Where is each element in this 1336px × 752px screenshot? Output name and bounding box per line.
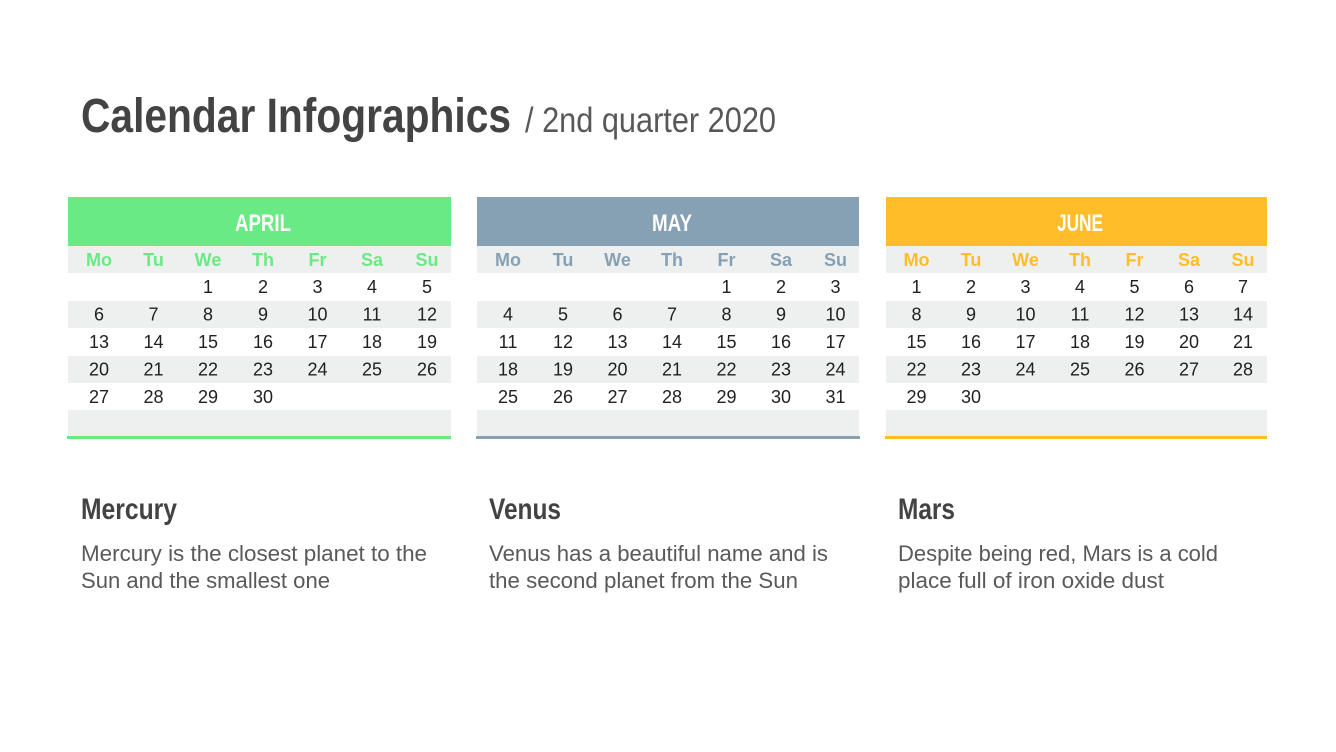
- day numbers: April: 18: [362, 332, 382, 352]
- weekday labels: May: Fr: [718, 250, 736, 270]
- day numbers: May: 11: [499, 332, 517, 352]
- day numbers: April: 7: [148, 304, 159, 324]
- day numbers: May: 4: [503, 304, 513, 324]
- day numbers: April: 30: [253, 387, 273, 407]
- day numbers: June: 20: [1179, 332, 1199, 352]
- day numbers: April: 1: [203, 277, 213, 297]
- weekday labels: April: Su: [415, 250, 439, 270]
- text block: Venus: the second planet from the Sun: [489, 568, 798, 593]
- day numbers: May: 2: [776, 277, 786, 297]
- day numbers: June: 25: [1070, 360, 1090, 380]
- day numbers: May: [498, 277, 846, 407]
- day numbers: May: 5: [558, 304, 568, 324]
- weekday labels: May: Su: [824, 250, 847, 270]
- day numbers: June: 30: [961, 387, 981, 407]
- day numbers: April: 21: [143, 360, 164, 380]
- day numbers: June: 12: [1124, 304, 1145, 324]
- weekday labels: June: Tu: [961, 250, 981, 270]
- day numbers: June: 21: [1233, 332, 1253, 352]
- day numbers: April: 22: [198, 360, 218, 380]
- day numbers: June: 29: [906, 387, 927, 407]
- weekday labels: May: We: [604, 250, 631, 270]
- day numbers: May: 29: [716, 387, 737, 407]
- weekday labels: April: Mo: [86, 250, 112, 270]
- day numbers: June: 9: [966, 304, 976, 324]
- day numbers: June: 23: [961, 360, 981, 380]
- weekday labels: May: Mo: [495, 250, 521, 270]
- day numbers: May: 13: [607, 332, 628, 352]
- day numbers: April: 13: [89, 332, 109, 352]
- weekday labels: June: We: [1012, 250, 1039, 270]
- day numbers: April: 6: [94, 304, 104, 324]
- day numbers: June: 2: [966, 277, 976, 297]
- day numbers: April: 4: [367, 277, 377, 297]
- day numbers: April: 10: [307, 304, 328, 324]
- day numbers: May: 14: [662, 332, 682, 352]
- text block: Mars: place full of iron oxide dust: [898, 568, 1164, 593]
- weekday labels: April: Th: [252, 250, 274, 270]
- day numbers: May: 8: [721, 304, 732, 324]
- day numbers: May: 22: [716, 360, 737, 380]
- day numbers: May: 25: [498, 387, 518, 407]
- text block: Mercury: Sun and the smallest one: [81, 568, 330, 593]
- day numbers: May: 6: [612, 304, 623, 324]
- month heading: April: APRIL: [235, 210, 291, 237]
- weekday labels: April: [86, 250, 439, 270]
- day numbers: June: 27: [1179, 360, 1199, 380]
- month heading: June: JUNE: [1057, 210, 1103, 237]
- day numbers: June: 28: [1233, 360, 1253, 380]
- weekday labels: April: Fr: [308, 250, 326, 270]
- day numbers: May: 7: [667, 304, 677, 324]
- day numbers: April: 14: [143, 332, 164, 352]
- weekday labels: May: Th: [661, 250, 683, 270]
- weekday labels: June: Su: [1231, 250, 1255, 270]
- day numbers: June: 1: [911, 277, 922, 297]
- weekday labels: June: Th: [1069, 250, 1091, 270]
- day numbers: April: 29: [198, 387, 218, 407]
- day numbers: June: 15: [906, 332, 927, 352]
- day numbers: June: 13: [1179, 304, 1199, 324]
- day numbers: June: 26: [1124, 360, 1145, 380]
- day numbers: April: 5: [422, 277, 432, 297]
- weekday labels: April: We: [195, 250, 221, 270]
- panel: May calendar: [476, 197, 860, 439]
- day numbers: June: 7: [1238, 277, 1248, 297]
- weekday labels: June: Mo: [904, 250, 930, 270]
- day numbers: May: 15: [716, 332, 737, 352]
- day numbers: May: 20: [607, 360, 628, 380]
- day numbers: June: 3: [1020, 277, 1031, 297]
- title: Calendar Infographics: [81, 90, 511, 143]
- day numbers: April: 3: [312, 277, 323, 297]
- day numbers: April: 20: [89, 360, 109, 380]
- day numbers: April: 2: [258, 277, 268, 297]
- title: / 2nd quarter 2020: [525, 101, 776, 140]
- day numbers: May: 27: [607, 387, 628, 407]
- day numbers: April: 23: [253, 360, 273, 380]
- day numbers: June: [906, 277, 1253, 407]
- day numbers: April: 26: [417, 360, 437, 380]
- day numbers: April: 8: [203, 304, 213, 324]
- text block: Mercury: Mercury: [81, 493, 177, 526]
- day numbers: May: 19: [553, 360, 573, 380]
- day numbers: May: 1: [721, 277, 732, 297]
- panel: April calendar: [67, 197, 451, 439]
- day numbers: April: 9: [258, 304, 268, 324]
- day numbers: June: 16: [961, 332, 981, 352]
- day numbers: May: 28: [662, 387, 682, 407]
- day numbers: June: 5: [1129, 277, 1140, 297]
- day numbers: May: 24: [825, 360, 846, 380]
- weekday labels: May: Sa: [770, 250, 793, 270]
- day numbers: April: 28: [143, 387, 164, 407]
- weekday labels: April: Sa: [361, 250, 384, 270]
- day numbers: June: 4: [1075, 277, 1085, 297]
- day numbers: April: 24: [307, 360, 328, 380]
- text block: Mars: Despite being red, Mars is a cold: [898, 541, 1218, 566]
- weekday labels: June: Sa: [1178, 250, 1201, 270]
- day numbers: May: 21: [662, 360, 682, 380]
- text block: Venus: Venus: [489, 493, 561, 526]
- day numbers: June: 6: [1184, 277, 1194, 297]
- text block: Venus: [489, 493, 828, 593]
- day numbers: April: 12: [417, 304, 437, 324]
- day numbers: April: 27: [89, 387, 109, 407]
- day numbers: June: 24: [1015, 360, 1036, 380]
- day numbers: May: 23: [771, 360, 791, 380]
- text block: Mercury: [81, 493, 427, 593]
- weekday labels: June: Fr: [1126, 250, 1144, 270]
- day numbers: June: 22: [906, 360, 927, 380]
- day numbers: June: 14: [1233, 304, 1253, 324]
- day numbers: June: 18: [1070, 332, 1090, 352]
- day numbers: June: 17: [1015, 332, 1036, 352]
- day numbers: April: 17: [307, 332, 328, 352]
- weekday labels: April: Tu: [143, 250, 164, 270]
- day numbers: May: 30: [771, 387, 791, 407]
- text block: Mars: [898, 493, 1218, 593]
- day numbers: May: 3: [830, 277, 841, 297]
- panel: June calendar: [885, 197, 1267, 439]
- day numbers: June: 10: [1015, 304, 1036, 324]
- day numbers: June: 19: [1124, 332, 1145, 352]
- day numbers: April: 25: [362, 360, 382, 380]
- day numbers: May: 18: [498, 360, 518, 380]
- day numbers: May: 10: [825, 304, 846, 324]
- weekday labels: May: [495, 250, 847, 270]
- day numbers: May: 17: [825, 332, 846, 352]
- day numbers: May: 12: [553, 332, 573, 352]
- day numbers: April: 15: [198, 332, 218, 352]
- day numbers: April: 19: [417, 332, 437, 352]
- month heading: May: MAY: [652, 210, 692, 237]
- day numbers: June: 8: [911, 304, 922, 324]
- day numbers: June: 11: [1071, 304, 1089, 324]
- text block: Mercury: Mercury is the closest planet to the: [81, 541, 427, 566]
- day numbers: April: 11: [363, 304, 381, 324]
- day numbers: April: [89, 277, 437, 407]
- weekday labels: May: Tu: [553, 250, 573, 270]
- text block: Mars: Mars: [898, 493, 955, 526]
- text block: Venus: Venus has a beautiful name and is: [489, 541, 828, 566]
- day numbers: May: 26: [553, 387, 573, 407]
- day numbers: May: 31: [825, 387, 846, 407]
- weekday labels: June: [904, 250, 1255, 270]
- day numbers: May: 16: [771, 332, 791, 352]
- day numbers: April: 16: [253, 332, 273, 352]
- day numbers: May: 9: [776, 304, 786, 324]
